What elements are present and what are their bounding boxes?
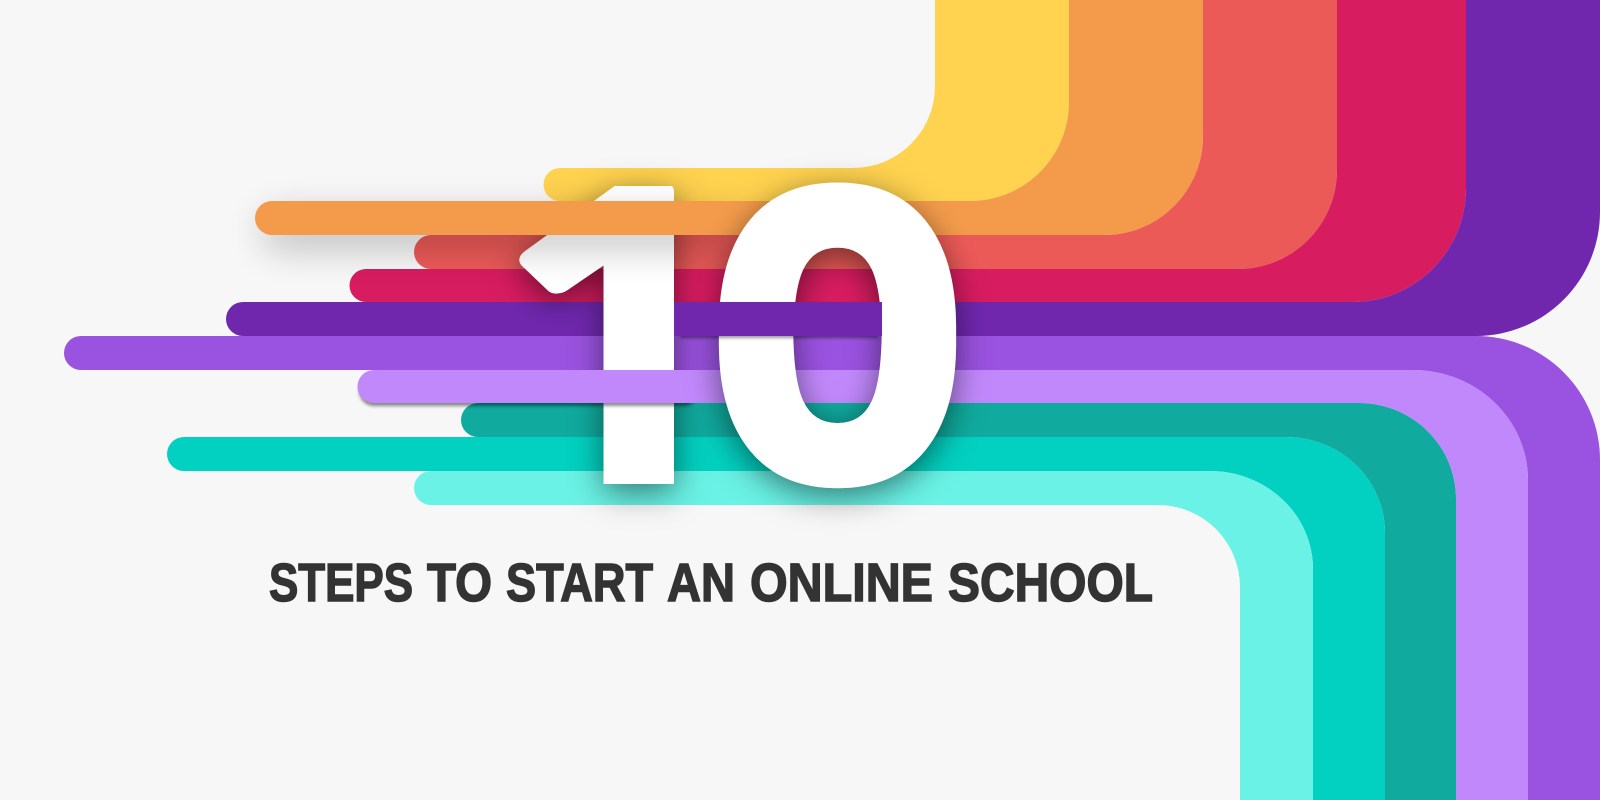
ribbon: light purple — [358, 370, 1528, 800]
title: STEPS — [269, 553, 413, 613]
ribbon: aqua — [414, 471, 1313, 800]
ribbon: red — [414, 0, 1337, 269]
shadow: orange ribbon — [262, 214, 742, 248]
title — [269, 553, 1153, 613]
ribbon: crimson — [350, 0, 1466, 302]
title: START — [506, 553, 653, 613]
ribbon: purple — [64, 336, 1600, 800]
title: SCHOOL — [948, 553, 1153, 613]
lower ribbons — [64, 336, 1600, 800]
ribbon: cyan — [167, 437, 1385, 800]
upper ribbons — [226, 0, 1600, 336]
shadow: purple strip over zero — [680, 304, 878, 338]
shadow: light purple ribbon — [359, 375, 699, 406]
purple strip woven over zero — [674, 302, 882, 336]
ribbon: dark purple — [226, 0, 1600, 336]
numeral zero: 0 — [700, 119, 975, 565]
ribbon: yellow — [544, 0, 1069, 201]
title: AN — [667, 553, 735, 613]
title: TO — [427, 553, 492, 613]
title: ONLINE — [750, 553, 933, 613]
ribbon: orange — [255, 0, 1203, 235]
numeral one: 1 — [448, 148, 804, 606]
ribbon: teal — [461, 403, 1456, 800]
